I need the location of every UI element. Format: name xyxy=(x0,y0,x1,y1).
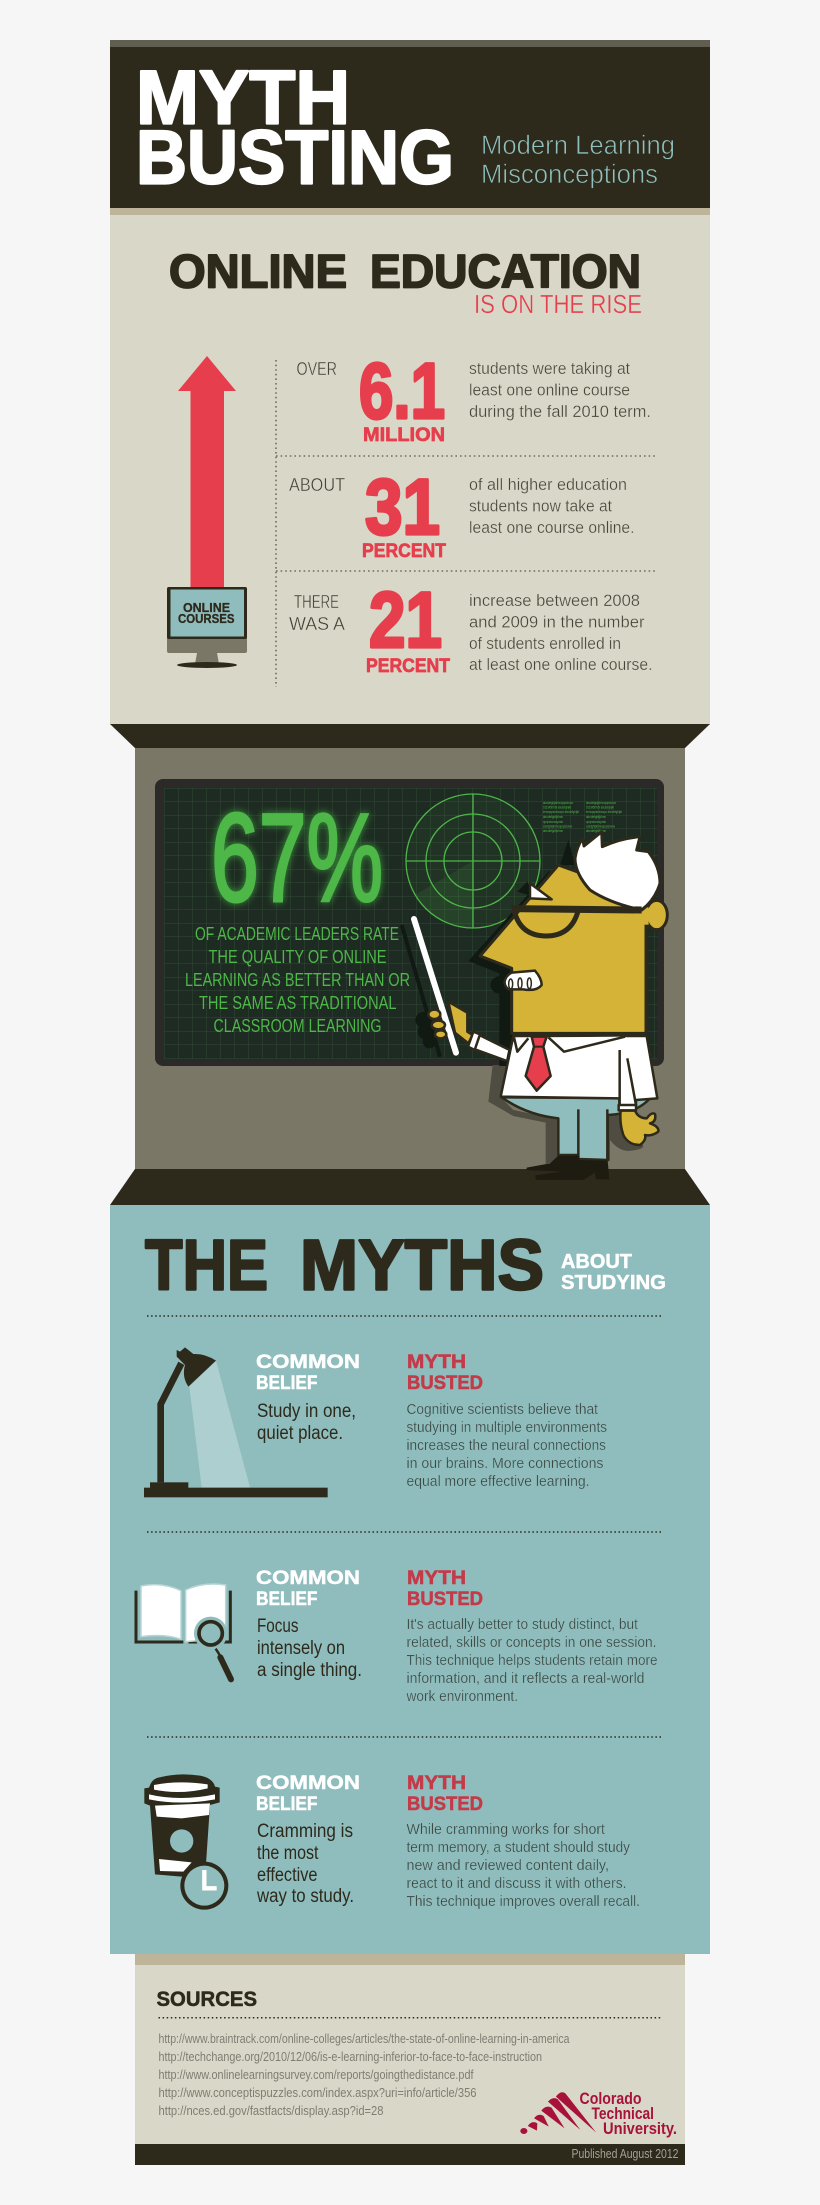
readout text: lmnopqrstuvwxyz abcdefghijkl xyxy=(543,810,579,814)
panel: sources xyxy=(135,1954,685,2165)
myth 3: busted: react to it and discuss it with others. xyxy=(406,1875,626,1892)
myth 2: busted xyxy=(406,1567,658,1705)
myth 2: common belief xyxy=(256,1567,362,1681)
logo: colorado technical university: Colorado xyxy=(580,2090,642,2108)
myth 1: common belief: quiet place. xyxy=(257,1423,343,1444)
icon: monitor online courses: COURSES xyxy=(178,612,234,626)
myth 1: busted: in our brains. More connections xyxy=(406,1455,604,1472)
myth 1: busted: increases the neural connections xyxy=(406,1437,606,1454)
stat: 31 percent: ABOUT xyxy=(289,475,345,495)
myth 1: busted: Cognitive scientists believe that xyxy=(406,1401,599,1418)
stat: 31 percent xyxy=(289,462,634,562)
stat: 21 percent: increase between 2008 xyxy=(469,591,640,610)
subheading: is on the rise: IS ON THE RISE xyxy=(474,289,642,319)
stat: 21 percent: 21 xyxy=(369,575,442,664)
board caption: CLASSROOM LEARNING xyxy=(214,1015,382,1036)
readout text: 0123456789 abcdefghijkl xyxy=(586,806,614,810)
myth 1: common belief: Study in one, xyxy=(257,1401,356,1422)
source links xyxy=(158,2032,570,2118)
myth 2: busted: It's actually better to study distinct, but xyxy=(406,1616,639,1633)
source links: http://www.conceptispuzzles.com/index.aspx?uri=info/article/356 xyxy=(158,2086,477,2100)
heading: online education xyxy=(169,244,641,298)
readout text: abcdefghijklmnopqrstuvw xyxy=(586,801,616,805)
myth 1: busted: MYTH xyxy=(407,1351,466,1373)
source links: http://nces.ed.gov/fastfacts/display.asp?id=28 xyxy=(158,2104,384,2118)
board caption: THE SAME AS TRADITIONAL xyxy=(199,992,396,1013)
myth 3: busted xyxy=(406,1772,640,1910)
arrow: rising xyxy=(178,356,236,588)
radar chart xyxy=(406,794,540,928)
publication date: Published August 2012 xyxy=(572,2146,678,2161)
heading: the myths: MYTHS xyxy=(300,1226,544,1306)
myth 2: busted: related, skills or concepts in one session. xyxy=(406,1634,656,1651)
readout text: abcdefghijklmn xyxy=(543,829,563,833)
stat: 21 percent: and 2009 in the number xyxy=(469,612,645,632)
myth 3: busted: new and reviewed content daily, xyxy=(406,1857,609,1874)
myth 3: common belief: BELIEF xyxy=(256,1793,318,1815)
stat: 21 percent: THERE xyxy=(294,592,339,612)
myth 2: busted: This technique helps students retain more xyxy=(406,1652,658,1669)
icon: open book and magnifier xyxy=(136,1584,231,1679)
myth 1: common belief: COMMON xyxy=(256,1351,360,1373)
stat: 31 percent: 31 xyxy=(365,462,440,551)
board caption xyxy=(185,923,410,1036)
title xyxy=(136,56,454,200)
stat: 31 percent: of all higher education xyxy=(469,475,627,494)
myth 3: busted: BUSTED xyxy=(407,1793,483,1815)
subheading: about studying xyxy=(561,1250,666,1294)
source links: http://techchange.org/2010/12/06/is-e-learning-inferior-to-face-to-face-instruction xyxy=(158,2050,542,2064)
logo: colorado technical university: Technical xyxy=(592,2105,654,2123)
stat: 21 percent: PERCENT xyxy=(366,655,450,677)
illustration: professor with pointer xyxy=(402,832,667,1180)
readout text: opqrstuvwxyzab xyxy=(543,820,563,824)
myth 3: common belief: the most xyxy=(257,1843,319,1864)
subtitle: Modern Learning xyxy=(481,130,675,160)
myth 3: common belief: way to study. xyxy=(256,1886,354,1907)
myth 2: common belief: intensely on xyxy=(257,1638,345,1659)
title: BUSTING xyxy=(136,116,454,200)
readout text: lmnopqrstuvwxyz abcdefghijkl xyxy=(586,810,622,814)
professor head xyxy=(468,832,667,1033)
stat: 21 percent xyxy=(289,575,652,677)
heading: the myths: THE xyxy=(145,1226,268,1306)
stat: 31 percent: least one course online. xyxy=(469,518,634,537)
heading: online education: ONLINE xyxy=(169,244,347,298)
readout text: abcdefghijklmn xyxy=(543,815,563,819)
subtitle xyxy=(481,130,675,189)
stat: 6.1 million: least one online course xyxy=(469,380,630,400)
subheading: about studying: STUDYING xyxy=(561,1271,666,1294)
chalkboard screen xyxy=(155,779,664,1066)
source links: http://www.braintrack.com/online-colleges/articles/the-state-of-online-learning-in-america xyxy=(158,2032,570,2046)
logo: colorado technical university xyxy=(520,2090,677,2138)
readout text xyxy=(543,801,622,833)
stat: 6.1 million: OVER xyxy=(296,359,337,379)
icon: desk lamp xyxy=(144,1347,328,1497)
board caption: LEARNING AS BETTER THAN OR xyxy=(185,969,410,990)
icon: monitor online courses xyxy=(167,587,247,668)
readout text: cdefghijklmnopqrstuvw xyxy=(586,824,615,828)
myth 2: common belief: COMMON xyxy=(256,1567,360,1589)
stat: 21 percent: of students enrolled in xyxy=(469,634,621,653)
subtitle: Misconceptions xyxy=(481,159,658,189)
stat: 31 percent: students now take at xyxy=(469,496,612,516)
myth 2: common belief: BELIEF xyxy=(256,1588,318,1610)
board caption: OF ACADEMIC LEADERS RATE xyxy=(195,923,399,944)
panel: classroom wall xyxy=(110,724,710,1205)
title: MYTH xyxy=(136,56,350,140)
dotted dividers xyxy=(147,1316,662,1737)
stat: 6.1 million: students were taking at xyxy=(469,359,630,378)
myth 3: common belief xyxy=(256,1772,360,1907)
stat: 6.1 million: 6.1 xyxy=(359,346,445,435)
professor body xyxy=(402,919,658,1180)
myth 1: busted: equal more effective learning. xyxy=(406,1473,590,1490)
readout text: abcdefghijklmnopqrstuvw xyxy=(543,801,573,805)
myth 3: common belief: COMMON xyxy=(256,1772,360,1794)
myth 1: busted: studying in multiple environments xyxy=(406,1419,607,1436)
myth 1: common belief xyxy=(256,1351,360,1444)
logo: colorado technical university: University. xyxy=(603,2120,677,2138)
stat: 6.1 million xyxy=(296,346,651,446)
dotted divider xyxy=(158,2017,662,2019)
panel: header banner xyxy=(110,40,710,215)
stat: 31 percent: PERCENT xyxy=(362,540,446,562)
readout text: opqrstuvwxyzab xyxy=(586,820,606,824)
source links: http://www.onlinelearningsurvey.com/reports/goingthedistance.pdf xyxy=(158,2068,474,2082)
myth 2: busted: work environment. xyxy=(406,1688,518,1705)
readout text: cdefghijklmnopqrstuvw xyxy=(543,824,572,828)
readout text: abcdefghijklmn xyxy=(586,829,606,833)
myth 3: common belief: Cramming is xyxy=(257,1821,353,1842)
myth 1: busted xyxy=(406,1351,607,1490)
myth 3: common belief: effective xyxy=(257,1865,318,1886)
myth 2: common belief: a single thing. xyxy=(257,1660,362,1681)
board caption: THE QUALITY OF ONLINE xyxy=(208,946,386,967)
stat: 21 percent: at least one online course. xyxy=(469,655,652,674)
myth 3: busted: While cramming works for short xyxy=(406,1821,606,1838)
myth 2: busted: BUSTED xyxy=(407,1588,483,1610)
stat: 67%: 67% xyxy=(211,789,383,928)
subheading: about studying: ABOUT xyxy=(561,1250,632,1273)
stat: 6.1 million: during the fall 2010 term. xyxy=(469,402,651,421)
readout text: abcdefghijklmn xyxy=(586,815,606,819)
myth 1: busted: BUSTED xyxy=(407,1372,483,1394)
panel: the myths xyxy=(110,1205,710,1954)
myth 3: busted: This technique improves overall recall. xyxy=(406,1893,640,1910)
myth 1: common belief: BELIEF xyxy=(256,1372,318,1394)
stat: 21 percent: WAS A xyxy=(289,614,345,634)
stat: 6.1 million: MILLION xyxy=(363,424,445,446)
heading: sources: SOURCES xyxy=(156,1988,257,2011)
heading: the myths xyxy=(145,1226,544,1306)
myth 3: busted: term memory, a student should study xyxy=(406,1839,630,1856)
icon: coffee cup and clock xyxy=(144,1774,228,1910)
myth 2: busted: MYTH xyxy=(407,1567,466,1589)
panel: online education xyxy=(110,215,710,725)
myth 2: common belief: Focus xyxy=(257,1616,298,1637)
readout text: 0123456789 abcdefghijkl xyxy=(543,806,571,810)
myth 2: busted: information, and it reflects a real-world xyxy=(406,1670,644,1687)
heading: online education: EDUCATION xyxy=(370,244,641,298)
dotted dividers xyxy=(276,360,657,687)
icon: monitor online courses: ONLINE xyxy=(183,601,230,615)
myth 3: busted: MYTH xyxy=(407,1772,466,1794)
